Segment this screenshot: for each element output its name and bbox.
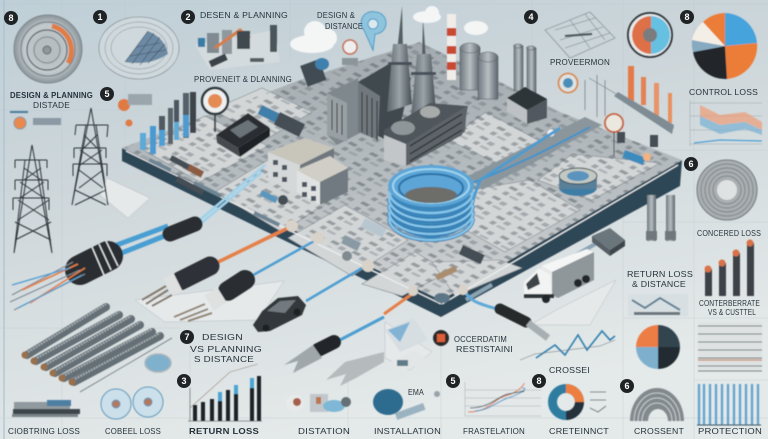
line chart: crosstalk zigzag (520, 331, 615, 360)
concentric disc (697, 160, 757, 220)
panel: coil circles (101, 387, 163, 419)
labels: headings and captions: PROVEERMON (550, 57, 610, 67)
pie chart: top right (692, 13, 757, 79)
labels: headings and captions: PROTECTION (698, 426, 762, 436)
labels: headings and captions: EMA (408, 387, 424, 397)
small module: black box on platform (216, 113, 270, 157)
panel: EMA icon (373, 389, 440, 420)
panel: isometric platform (122, 42, 682, 317)
number badges: 3 (181, 376, 187, 386)
clouds (290, 6, 488, 53)
tool: wrench cable (284, 317, 384, 386)
number badges: 8 (536, 376, 542, 386)
buildings: factory block (384, 103, 468, 166)
labels: headings and captions: DESIGN & (317, 10, 355, 20)
line chart: control loss (690, 100, 762, 146)
number badges: 7 (184, 332, 190, 342)
sketch: orange indicator (433, 330, 449, 346)
cable coil (388, 128, 560, 240)
panel: mesh dome (99, 17, 179, 79)
icon: transmission tower left (13, 145, 52, 253)
cable bundle rods (22, 304, 172, 392)
labels: headings and captions: CROSSEI (549, 365, 590, 375)
device pillars (646, 195, 676, 241)
small device (592, 228, 625, 256)
bar chart: dark bars orange caps (704, 240, 754, 296)
bar panel: protection (697, 384, 761, 425)
panel: distation icons (286, 394, 351, 412)
number badges: 8 (8, 13, 14, 23)
labels: headings and captions: PROVENEIT & DLANNING (194, 74, 292, 84)
panel: disc top left (14, 15, 82, 83)
car (253, 296, 306, 332)
cable: right connector and orange cable end (384, 285, 548, 338)
cable: orange connector (142, 220, 298, 306)
icon: transmission tower right (72, 108, 108, 205)
circular tank on platform (559, 168, 597, 196)
number badges (4, 10, 698, 393)
panel: insulation stack (12, 400, 80, 417)
bar chart: return loss (188, 364, 262, 421)
bar chart: orange bars (585, 66, 674, 134)
number badges: 4 (528, 12, 534, 22)
icon: road signs (558, 74, 623, 156)
buildings: main grey towers (327, 62, 411, 145)
icon: small target badge (300, 40, 358, 87)
labels: headings and captions: RETURN LOSS (627, 269, 693, 279)
labels: headings and captions: S DISTANCE (194, 354, 254, 364)
labels: headings and captions: DISTADE (33, 100, 70, 110)
labels: headings and captions: INSTALLATION (374, 426, 441, 436)
cable: blue connector (174, 232, 374, 321)
pie chart: lower right (636, 325, 680, 369)
semi-circle fan (630, 388, 684, 421)
number badges: 5 (104, 89, 110, 99)
map sketch (628, 294, 688, 316)
number badges: 8 (684, 12, 690, 22)
labels: headings and captions: DESIGN & PLANNING (10, 90, 93, 100)
panel: proveermon sketch (545, 12, 615, 58)
stripes panel (698, 322, 762, 372)
labels: headings and captions: & DISTANCE (632, 279, 686, 289)
labels: headings and captions: VS PLANNING (190, 344, 262, 354)
small equipment on platform (169, 105, 658, 303)
labels: headings and captions: FRASTELATION (463, 426, 525, 436)
buildings: smokestacks (387, 6, 547, 124)
labels: headings and captions: CONTROL LOSS (689, 87, 758, 97)
bar chart: blue dark bars (140, 92, 196, 154)
labels: headings and captions: DISTATION (298, 426, 350, 436)
labels: headings and captions: CROSSENT (634, 426, 684, 436)
labels: headings and captions: CIOBTRING LOSS (8, 426, 80, 436)
map pin (361, 12, 386, 50)
labels: headings and captions: COBEEL LOSS (105, 426, 161, 436)
number badges: 5 (450, 376, 456, 386)
cable: big connector with blue wires (10, 165, 265, 310)
donut chart (552, 384, 606, 420)
labels: headings and captions: DISTANCE (325, 21, 363, 31)
labels: headings and captions: RETURN LOSS (189, 426, 259, 436)
icon: sketch cluster (10, 94, 152, 129)
number badges: 6 (624, 381, 630, 391)
icon: target pin (202, 88, 228, 132)
buildings: lower offices (268, 138, 348, 205)
labels: headings and captions: DESEN & PLANNING (200, 10, 288, 20)
delivery truck (524, 249, 594, 303)
number badges: 6 (688, 159, 694, 169)
number badges: 1 (97, 12, 103, 22)
labels: headings and captions: OCCERDATIM (454, 334, 507, 344)
panel: planning sketch (195, 25, 280, 70)
gauge icon (628, 13, 672, 57)
line chart: frastelation (465, 382, 541, 416)
panel: blueprint sketches (100, 178, 616, 370)
panel: blueprint map (385, 318, 428, 372)
labels: headings and captions: DESIGN (202, 332, 243, 342)
labels: headings and captions: CRETEINNCT (549, 426, 609, 436)
number badges: 2 (185, 12, 191, 22)
labels: headings and captions: RESTISTAINI (456, 344, 513, 354)
